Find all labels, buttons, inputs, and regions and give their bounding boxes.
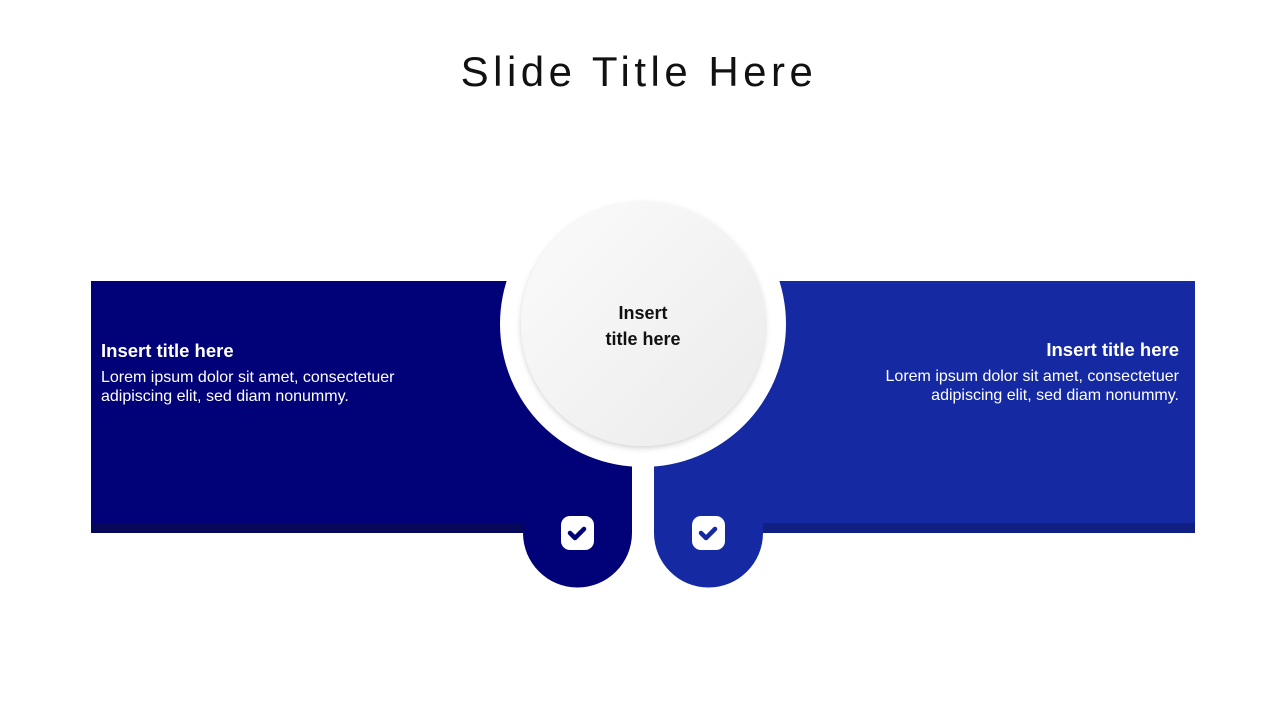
text block: left: Lorem ipsum dolor sit amet, consectetuer: [101, 369, 395, 386]
heading: right: Insert title here: [1046, 339, 1179, 360]
title: Slide Title Here: [461, 48, 817, 95]
icon: check right: [692, 516, 725, 550]
panel: right: [654, 281, 1195, 587]
center title: title here: [605, 329, 681, 349]
icon: check left: [561, 516, 594, 550]
panel: left: [91, 281, 632, 587]
center title: Insert: [618, 303, 668, 323]
text block: right: adipiscing elit, sed diam nonummy.: [931, 387, 1179, 404]
heading: left: Insert title here: [101, 340, 234, 361]
stem gap: [632, 460, 654, 600]
text block: left: adipiscing elit, sed diam nonummy.: [101, 388, 349, 405]
text block: right: Lorem ipsum dolor sit amet, consectetuer: [886, 368, 1180, 385]
center circle: [500, 181, 786, 467]
